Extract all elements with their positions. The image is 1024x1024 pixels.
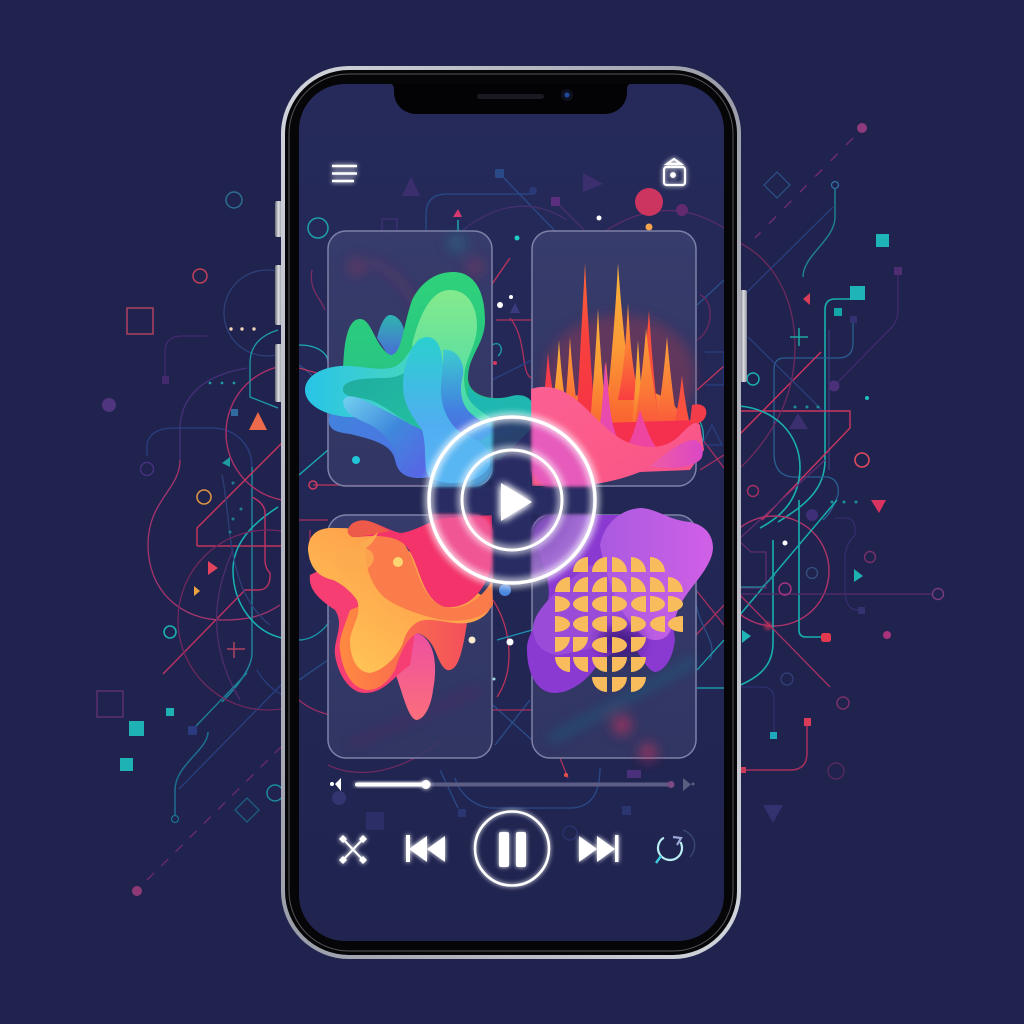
line network left of phone <box>147 270 362 880</box>
icon: pause <box>475 812 549 886</box>
shapes on screen <box>308 169 688 840</box>
line network right of phone <box>719 138 932 770</box>
icon: menu <box>332 166 357 181</box>
camera <box>561 89 573 101</box>
icon: repeat <box>654 830 695 864</box>
notch <box>390 84 631 114</box>
background lines on screen <box>299 178 724 808</box>
media controls <box>339 812 618 886</box>
blob: blue green <box>305 272 534 483</box>
blurred lights in cards <box>348 234 696 761</box>
icon: bag <box>664 159 685 185</box>
phone body <box>281 66 741 959</box>
icon: shuffle <box>339 835 367 864</box>
blob: purple with half-circle grid <box>527 508 713 693</box>
card panels <box>328 231 696 758</box>
scattered shapes right <box>741 123 944 823</box>
icon: previous <box>406 835 445 862</box>
progress bar <box>330 778 694 791</box>
play disc tints <box>428 414 596 586</box>
icon: next <box>579 835 618 862</box>
speaker <box>477 94 544 99</box>
screen content <box>299 159 724 886</box>
blob: orange <box>308 515 493 720</box>
centre play button <box>429 417 595 583</box>
screen <box>299 84 724 941</box>
scattered shapes left <box>97 192 283 896</box>
phone <box>275 66 747 959</box>
side buttons <box>275 201 747 402</box>
blob: sound wave <box>531 263 706 486</box>
small white dots <box>468 295 514 680</box>
